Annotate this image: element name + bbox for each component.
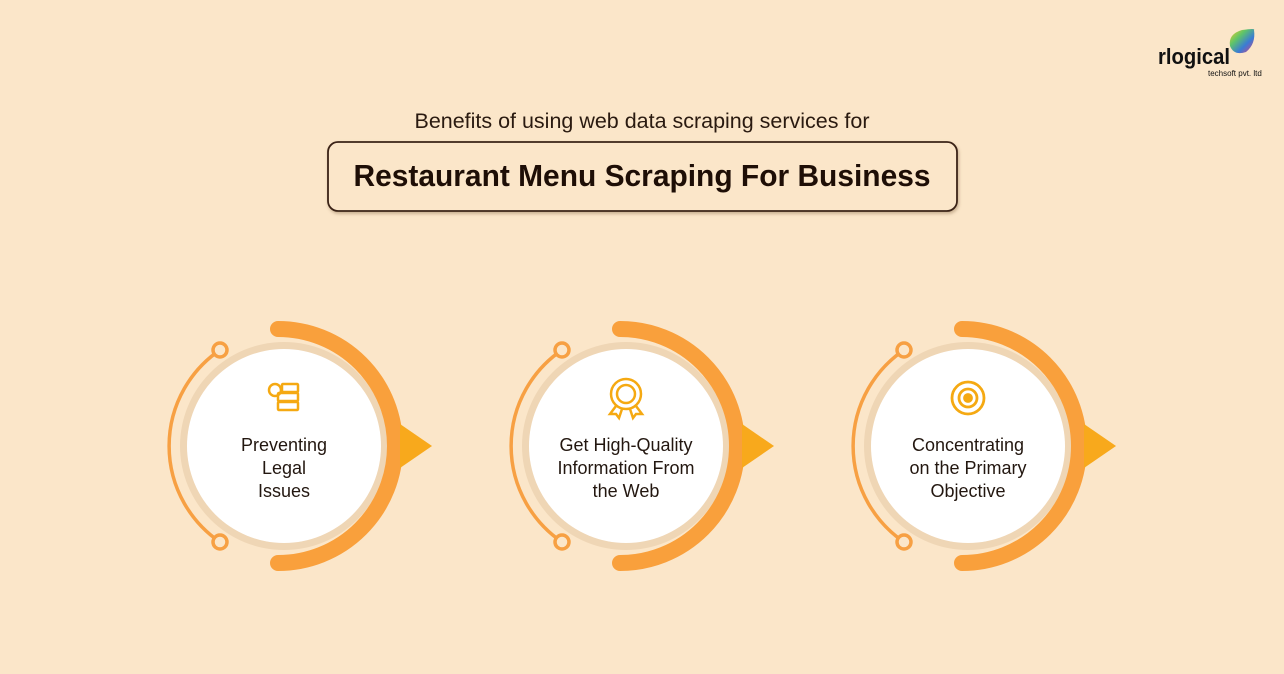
title box: Restaurant Menu Scraping For Business [354,158,930,193]
icon: award badge [610,379,642,418]
panel: primary objective: on the Primary [909,458,1027,478]
logo: rlogical [1158,44,1230,69]
panel: preventing legal issues: Preventing [241,435,327,455]
panel: preventing legal issues [169,329,432,563]
icon: server alert [269,384,298,410]
panel: high-quality information [511,329,774,563]
subtitle: Benefits of using web data scraping services for [414,110,870,133]
icon: target [952,382,984,414]
panel: preventing legal issues: Legal [262,458,306,478]
panel: primary objective: Objective [930,481,1006,501]
logo [1158,29,1262,78]
panel: high-quality information: Information From [557,458,695,478]
panel: primary objective [853,329,1116,563]
title box [328,142,957,211]
logo: techsoft pvt. ltd [1208,69,1262,78]
panel: preventing legal issues: Issues [258,481,310,501]
panel: primary objective: Concentrating [912,435,1024,455]
panel: high-quality information: Get High-Quality [559,435,693,455]
panel: high-quality information: the Web [593,481,659,501]
